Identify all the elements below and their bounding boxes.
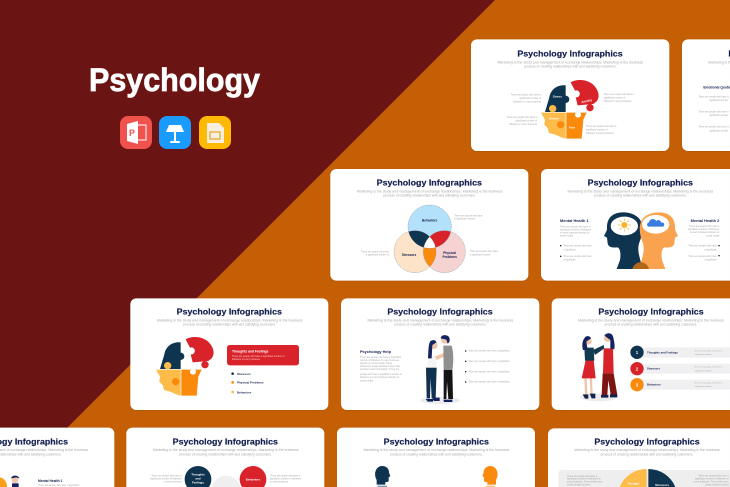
heading: Psychology Infographics (384, 436, 489, 446)
subtitle (363, 448, 509, 456)
left text column: in every business domain on (560, 231, 590, 234)
list row 2 (630, 362, 730, 375)
right text column: social media (706, 236, 720, 238)
venn labels: Behaviors (422, 218, 438, 222)
right text column (688, 219, 720, 262)
callout texts: significant number of (604, 96, 626, 99)
text left and right: significant number of followers in (695, 477, 729, 480)
list row 2: 2 (636, 366, 639, 371)
text block (38, 479, 80, 487)
callout: thoughts and feelings (227, 345, 299, 365)
legend list (231, 372, 264, 394)
subtitle: Marketing is the study and management of exchange relationships. Marketing is the business (578, 318, 724, 322)
subtitle: process of creating relationships with and satisfying customers. (183, 323, 276, 327)
list row 2: significant number (694, 369, 712, 372)
pie chart: Stressors (655, 483, 669, 487)
illustration: figure (0, 476, 19, 487)
right text column: There are people who have (688, 255, 717, 258)
icon: navy head (375, 466, 390, 485)
subtitle: Marketing is the study and management of exchange relationships. Marketing is the business (574, 448, 720, 452)
heading: Psychology Infographics (517, 48, 623, 58)
right text column: in every business domain on (690, 231, 720, 234)
head silhouettes (604, 212, 678, 269)
subtitle (567, 189, 713, 198)
subtitle: Marketing is the study and management of exchange relationships. Marketing is the business (153, 448, 299, 452)
left column text: significant number (709, 129, 728, 132)
left column text: significant number (709, 114, 728, 117)
bullet list: There are people who have a significant (468, 360, 510, 363)
piece labels: Anxiety (581, 98, 593, 104)
piece labels: Shame (549, 116, 559, 120)
subtitle: process of creating relationships with and satisfying customers. (179, 452, 272, 456)
diagram: circles (185, 466, 266, 487)
callout texts: There are people who have (454, 214, 483, 217)
callout texts: followers in every business (513, 101, 542, 104)
bullet list (465, 350, 510, 384)
list row 1: Thoughts and Feelings (647, 351, 678, 355)
panel: puzzle head with list (130, 298, 328, 410)
text left and right: every business. These influencers (694, 480, 729, 483)
left column text: There are people who have a (698, 111, 729, 114)
panel: pie chart (cropped) (548, 428, 730, 487)
left text column: significant number of followers (560, 228, 592, 231)
left column text (698, 86, 730, 132)
icon: navy head base (378, 486, 387, 487)
heading: Psychology Infographics (387, 307, 493, 317)
left column text: significant number (709, 99, 728, 102)
left text column: social media (560, 236, 574, 238)
callout texts: followers in every business (509, 123, 538, 126)
icon: Google Slides (199, 116, 231, 149)
diagram: circles: Feelings (192, 480, 204, 484)
panel: circles comparison (cropped) (126, 428, 324, 487)
icon: Keynote (159, 116, 191, 149)
left text column: Mental Health 1 (560, 219, 589, 223)
list row 2: There are people who have a (694, 366, 723, 369)
panel: venn diagram (330, 169, 528, 281)
diagram: circles: and (195, 476, 201, 480)
callout: thoughts and feelings: Thoughts and Feelings (232, 350, 269, 354)
subtitle: process of creating relationships with and satisfying customers. (394, 323, 487, 327)
list row 3 (630, 378, 730, 391)
heading: Psychology Infographics (177, 307, 282, 317)
illustration: two women (580, 333, 617, 401)
text left and right: create detailed content (567, 483, 591, 486)
subtitle: process of creating relationships with and satisfying customers. (390, 452, 483, 456)
left text column: a significant (563, 259, 576, 262)
callout texts: There are people who have a (151, 474, 182, 477)
panel: numbered list (552, 298, 730, 410)
heading: Psychology Infographics (173, 436, 278, 446)
text left and right: There are people who have a (567, 475, 598, 478)
right text column: There are people who have a (689, 225, 720, 228)
panel: two head icons (cropped) (337, 428, 535, 487)
illustration: couple (420, 335, 460, 404)
subtitle: process of creating relationships with and satisfying customers. (605, 323, 697, 327)
list row 3: significant number (694, 385, 712, 388)
right text column: Mental Health 2 (691, 219, 719, 223)
subtitle: Marketing is the study and management of exchange relationships. Marketing is the business (363, 448, 509, 452)
diagram: circles: Thoughts (191, 472, 205, 476)
text block: Mental Health 1 (38, 479, 63, 483)
heading: Psychology Infographics (588, 178, 693, 188)
subtitle (157, 318, 303, 327)
text block: psychology help: provides useful information. There are (360, 368, 400, 371)
bullet list: There are people who have a significant (468, 381, 510, 384)
callout texts: There are people who have a (507, 116, 538, 119)
icon row: app formats (120, 116, 231, 149)
heading: Psychology Infographics (377, 178, 482, 188)
right text column: significant number of followers (688, 228, 720, 231)
text block: psychology help: number of followers in every business (360, 359, 400, 362)
subtitle: process of creating relationships with and satisfying customers. (524, 65, 617, 69)
callout: thoughts and feelings: There are people who have a significant number of (232, 355, 285, 358)
main title: Psychology (89, 62, 260, 98)
text block: There are people who have a significant (38, 484, 80, 487)
subtitle: Marketing is the study and management of exchange relationships. Marketing is the business (567, 189, 713, 193)
list row 3: There are people who have a (694, 382, 723, 385)
text block: psychology help: social media. (360, 381, 374, 383)
list row 1: There are people who have a (694, 350, 723, 353)
text block: psychology help: influencers create detailed content that (360, 365, 400, 368)
piece labels (549, 95, 593, 130)
heading: Psychology Infographics (594, 436, 700, 446)
right text column: There are people who have (688, 245, 717, 248)
list row 1 (630, 346, 730, 359)
callout texts: followers in every business (586, 132, 615, 135)
diagram: circles: Behaviors (246, 477, 261, 481)
subtitle (574, 448, 720, 456)
callout texts (507, 93, 635, 135)
text block: psychology help: domain on social media. These (360, 363, 393, 365)
callout texts: followers in every business (604, 100, 632, 103)
piece labels: Stress (553, 95, 562, 99)
list row 3: 3 (636, 382, 639, 387)
list row 1: 1 (636, 350, 639, 355)
callout: thoughts and feelings: followers in every business (232, 358, 261, 361)
icon: brain with cloud (642, 215, 669, 234)
callout texts: significant number of (520, 97, 541, 100)
callout texts: in every business (164, 481, 182, 484)
piece labels: Fear (569, 126, 576, 130)
list row 1: significant number (694, 353, 712, 356)
text left and right: significant number of followers in (567, 478, 601, 481)
venn labels: Stressors (402, 253, 417, 257)
panel: mental health figure (cropped) (0, 428, 114, 487)
callout texts: There are people who have a (511, 94, 542, 97)
venn labels (402, 218, 457, 259)
puzzle head chart (541, 80, 599, 139)
callout texts: There are people who have (361, 250, 390, 253)
subtitle (497, 60, 643, 69)
left text column: There are people who have a (560, 225, 591, 228)
callout texts: There are people who have a (586, 125, 617, 128)
callout texts: There are people who have a (270, 474, 301, 477)
panel: emotional quotient (cropped) (682, 39, 730, 151)
text left and right: create detailed content (705, 483, 729, 486)
panel: puzzle head with labels (471, 39, 669, 151)
subtitle (367, 318, 513, 327)
subtitle: Marketing is the study and management of exchange relationships. Marketing is the business (367, 318, 513, 322)
subtitle: process of creating relationships with and satisfying customers. (383, 194, 476, 198)
bullet list: There are people who have a significant (468, 370, 510, 373)
text block: psychology help: followers in every business domain on (360, 376, 400, 379)
left column text: There are people who have a (698, 96, 729, 99)
text left and right (567, 474, 729, 486)
text left and right: There are people who have a (698, 474, 729, 477)
left text column: There are people who have (563, 245, 592, 248)
pie chart: Thought (627, 481, 639, 485)
legend list: Physical Problems (237, 381, 264, 385)
puzzle head chart (156, 337, 214, 396)
venn labels: Problems (442, 255, 457, 259)
heading: Psychology Infographics (598, 307, 704, 317)
text block: psychology help: people who have a significant number of (360, 373, 402, 376)
callout texts (361, 214, 499, 257)
legend list: Behaviors (237, 390, 252, 394)
subtitle (153, 448, 299, 456)
text left and right: every business. These influencers (567, 480, 603, 483)
subtitle (0, 448, 88, 456)
icon: orange head (482, 466, 498, 485)
subtitle (357, 189, 503, 198)
subtitle: Marketing is the study and management of exchange relationships. Marketing is the business (357, 189, 503, 193)
callout texts (150, 474, 302, 484)
legend list: Stressors (237, 372, 251, 376)
list row 2: Stressors (647, 367, 660, 371)
subtitle: Marketing is the study and management of exchange relationships. Marketing is the business (157, 318, 303, 322)
left text column: There are people who have (563, 255, 592, 258)
text block: psychology help (360, 350, 402, 383)
subtitle: process of creating relationships with and satisfying customers. (601, 452, 693, 456)
right text column: a significant (704, 259, 717, 262)
venn chart (394, 205, 465, 273)
subtitle: process of creating relationships with and satisfying customers. (594, 194, 687, 198)
panel: mental health heads (541, 169, 730, 281)
callout texts: significant number of followers (150, 477, 182, 480)
left text column: a significant (563, 248, 576, 251)
subtitle: Marketing is the study and management of exchange relationships. Marketing is the business (497, 60, 643, 64)
callout texts: There are people who have a (604, 93, 635, 96)
icon: PowerPoint: P (129, 128, 135, 138)
callout texts: significant number of (516, 119, 537, 122)
text block: psychology help: There are people who have a significant (360, 356, 402, 359)
subtitle (578, 318, 724, 327)
callout texts: a significant number (454, 218, 475, 221)
text block: psychology help: Psychology Help (360, 350, 391, 354)
callout texts: a significant number (470, 254, 491, 257)
icon: brain with sun (611, 217, 638, 235)
callout texts: significant number of (586, 128, 608, 131)
list row 3: Behaviors (647, 383, 661, 387)
venn labels: Physical (443, 251, 456, 255)
callout texts: significant number of followers (270, 477, 302, 480)
grey band (558, 470, 730, 487)
left column text: There are people who have a (698, 126, 729, 129)
pie chart (620, 469, 675, 487)
callout texts: a significant number of (366, 254, 390, 257)
callout texts: in every business (270, 481, 289, 484)
panel: psychology help (341, 298, 539, 410)
bullet list: There are people who have a significant (468, 350, 510, 353)
left text column (560, 219, 592, 262)
right text column: a significant (704, 248, 717, 251)
icon: orange head base (486, 486, 495, 487)
callout texts: There are people who have (470, 250, 499, 253)
